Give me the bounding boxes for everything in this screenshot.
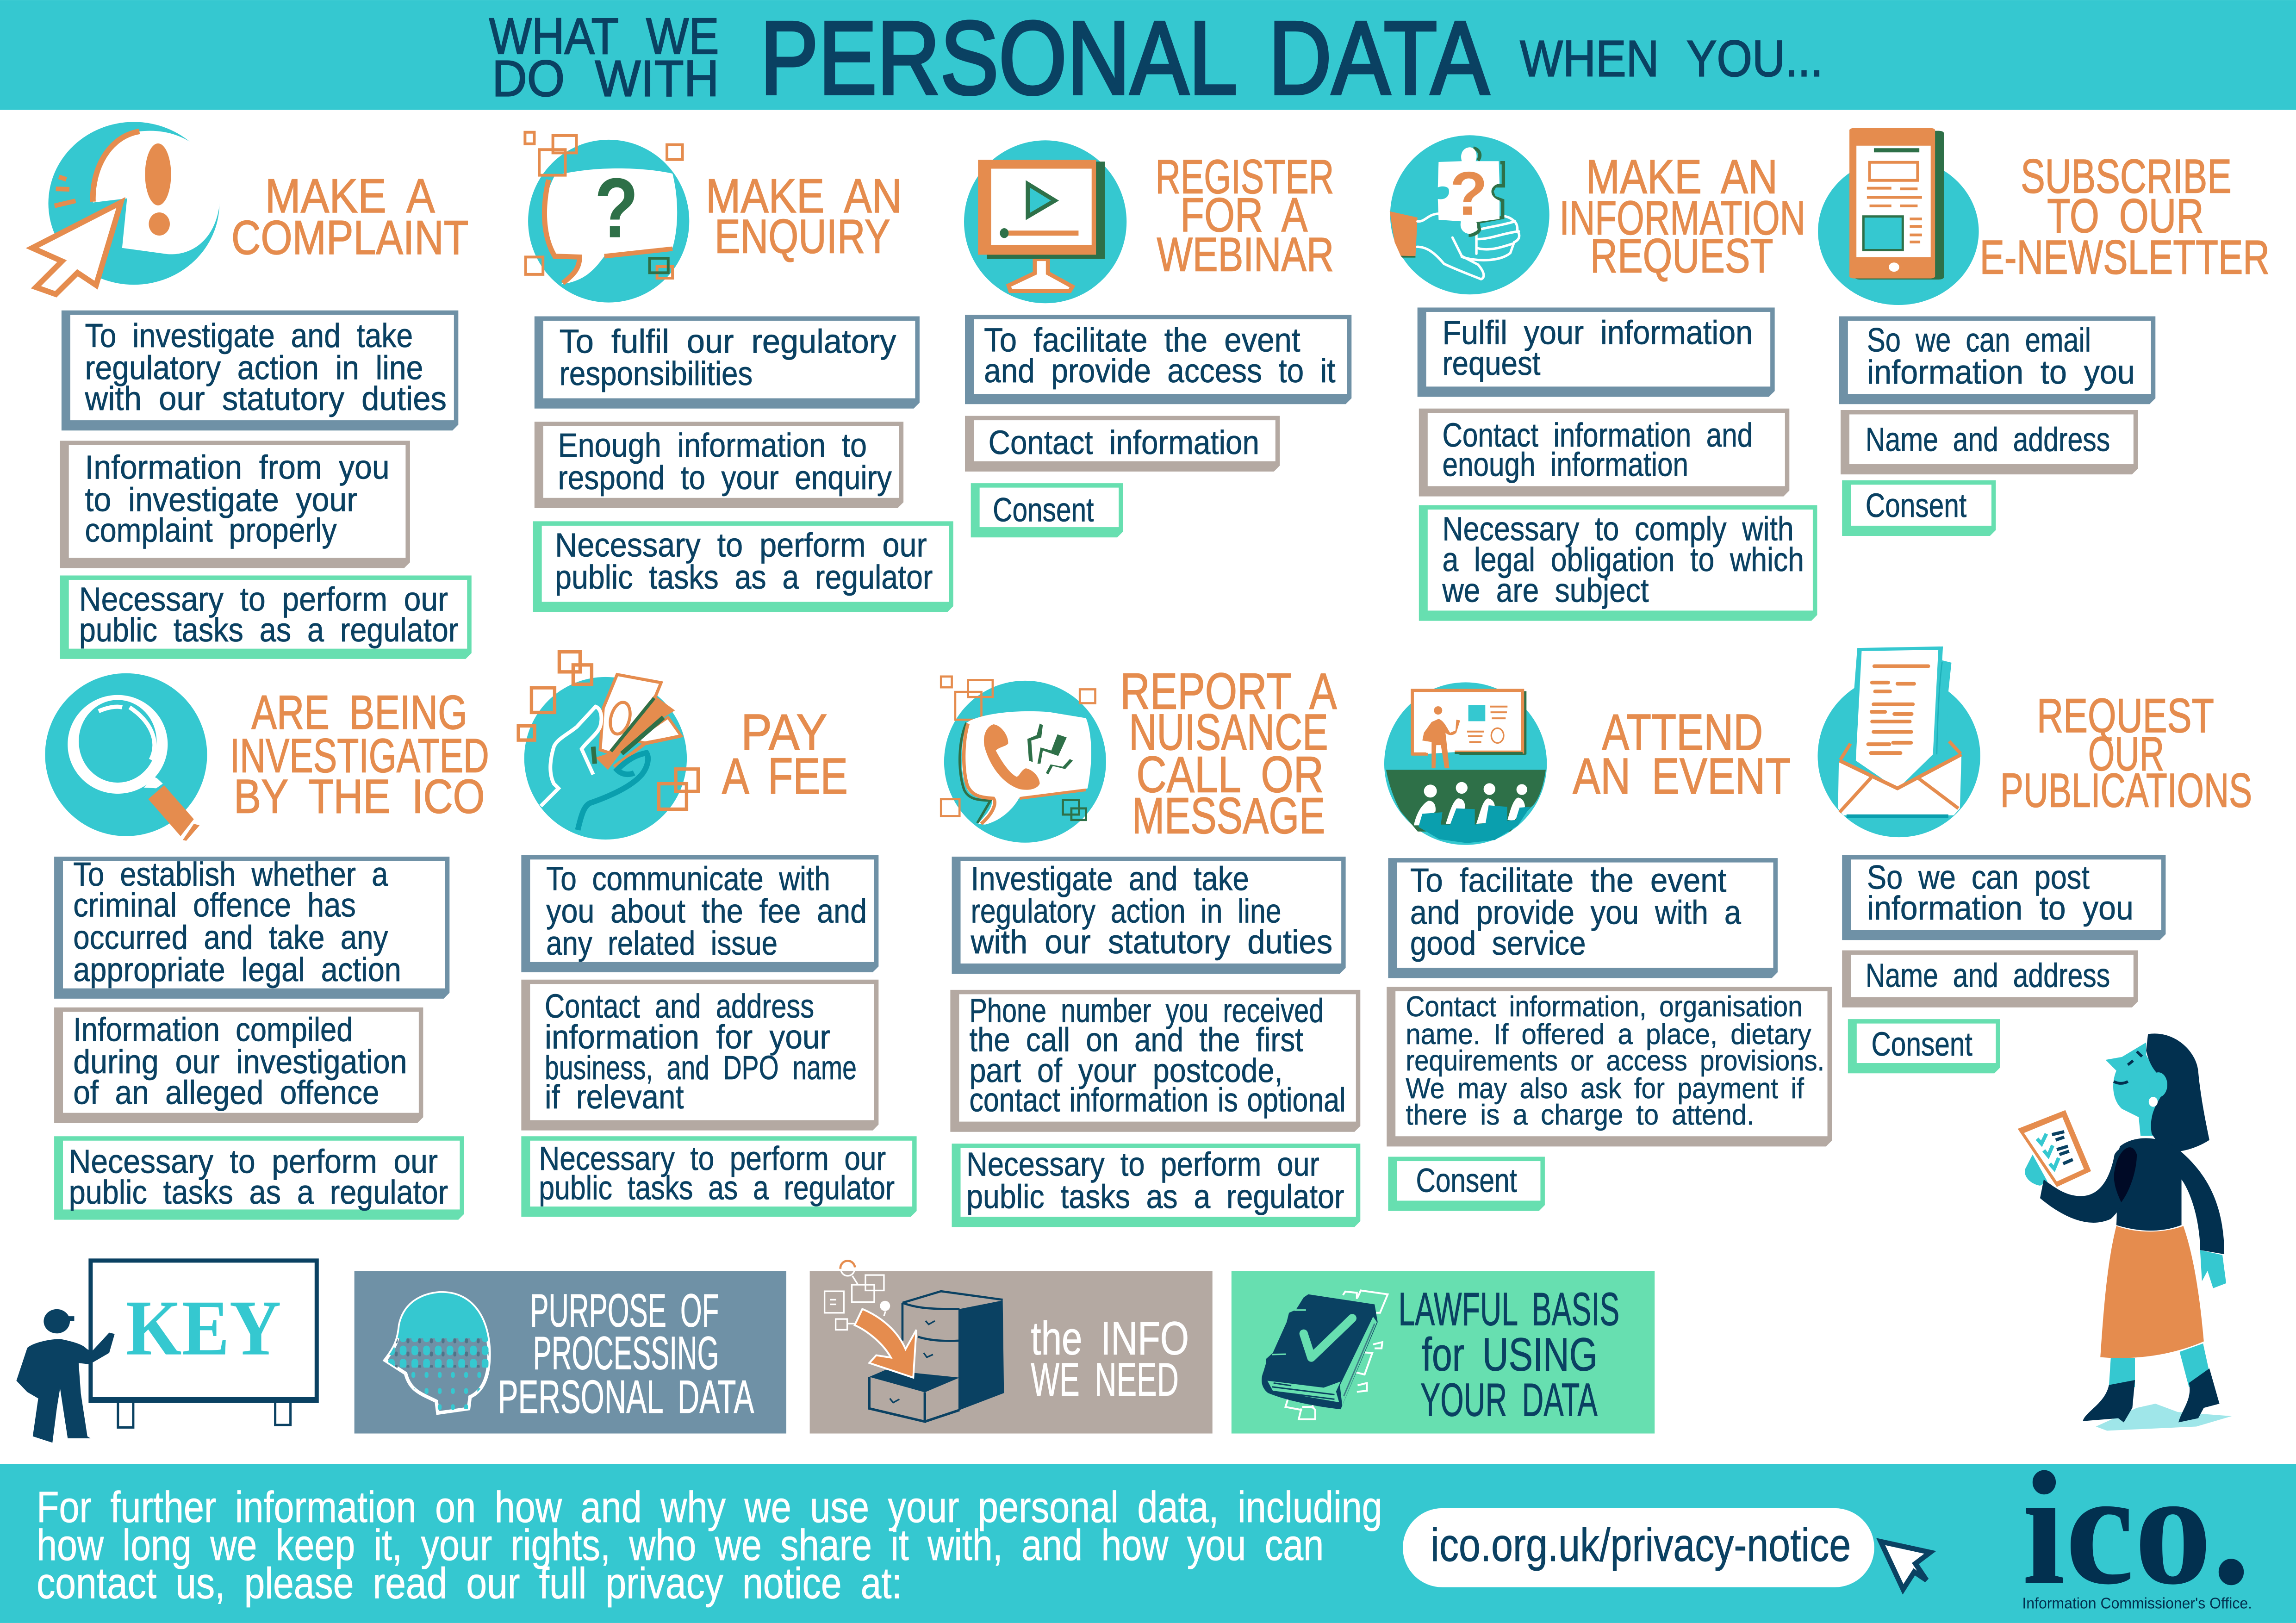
box: lawful basis: Necessary to comply with	[1442, 510, 1794, 548]
heading: CALL OR	[1136, 746, 1324, 803]
box: lawful basis	[60, 575, 472, 659]
box: information needed: respond to your enquiry	[558, 459, 892, 497]
box: information needed: if relevant	[545, 1078, 684, 1116]
box: lawful basis: public tasks as a regulator	[966, 1178, 1344, 1215]
heading: REQUEST	[2037, 689, 2214, 743]
heading: REPORT A	[1120, 663, 1337, 720]
icon: presenter and audience	[1384, 682, 1547, 845]
icon: speech bubble with ringing phone	[941, 677, 1106, 843]
panel: register for a webinar	[964, 140, 1351, 537]
footer text: how long we keep it, your rights, who we share it with, and how you can	[37, 1521, 1324, 1570]
text: YOUR DATA	[1420, 1374, 1598, 1426]
box: information needed: Information compiled	[73, 1011, 353, 1049]
key	[16, 1261, 317, 1443]
panel: pay a fee	[518, 652, 917, 1217]
box: information needed: Name and address	[1866, 421, 2110, 459]
heading: AN EVENT	[1573, 748, 1791, 805]
box: purpose: Investigate and take	[971, 860, 1249, 898]
heading: WEBINAR	[1157, 227, 1334, 281]
box: lawful basis: Consent	[1871, 1026, 1972, 1063]
title	[489, 0, 1823, 116]
box: lawful basis: we are subject	[1442, 572, 1649, 609]
icon: letter in open envelope	[1817, 647, 1980, 837]
heading: INFORMATION	[1560, 191, 1805, 245]
box: purpose: To investigate and take	[85, 317, 413, 354]
heading: INVESTIGATED	[230, 728, 489, 783]
privacy notice link pill: ico.org.uk/privacy-notice	[1431, 1519, 1851, 1571]
box: information needed: the call on and the first	[970, 1021, 1303, 1059]
box: purpose: regulatory action in line	[85, 349, 423, 387]
heading: TO OUR	[2047, 189, 2204, 243]
heading: MAKE AN	[1586, 150, 1778, 204]
box: lawful basis: Consent	[1416, 1162, 1517, 1199]
box: lawful basis: Consent	[993, 491, 1094, 529]
title: WHAT WE	[489, 8, 719, 65]
box: information needed	[1387, 987, 1832, 1146]
box: information needed	[950, 990, 1360, 1132]
box: information needed	[1419, 409, 1789, 497]
box: purpose: regulatory action in line	[971, 892, 1281, 930]
text: PROCESSING	[533, 1327, 719, 1379]
heading	[1573, 704, 1791, 805]
icon: book with tick	[1262, 1290, 1388, 1419]
heading: BY THE ICO	[234, 770, 485, 824]
box: information needed: Enough information to	[558, 427, 867, 464]
box: information needed: requirements or access provisions.	[1406, 1045, 1824, 1077]
heading	[1120, 663, 1337, 844]
heading: NUISANCE	[1129, 704, 1328, 761]
panel: make an enquiry	[525, 132, 953, 612]
presenter pointing at key board	[16, 1261, 317, 1443]
box: purpose	[1418, 307, 1775, 397]
box: purpose: appropriate legal action	[73, 951, 401, 989]
icon: magnifying glass	[45, 673, 207, 841]
text: WE NEED	[1031, 1353, 1179, 1405]
box: lawful basis	[971, 483, 1123, 537]
footer text	[37, 1483, 1382, 1608]
panel: make an information request	[1390, 135, 1817, 621]
key: the info we need	[810, 1261, 1213, 1434]
key: lawful basis for using your data	[1232, 1271, 1655, 1434]
box: information needed: Contact information and	[1442, 417, 1753, 454]
box: information needed: part of your postcode,	[970, 1052, 1283, 1089]
box: information needed	[1841, 410, 2138, 474]
panel: attend an event	[1384, 682, 1832, 1211]
key: purpose of processing personal data	[355, 1271, 786, 1434]
box: lawful basis	[54, 1136, 464, 1220]
heading: REQUEST	[1590, 229, 1773, 283]
box: lawful basis	[1419, 505, 1817, 621]
title: WHEN YOU...	[1520, 31, 1823, 87]
box: purpose	[952, 857, 1346, 974]
icon: cursor	[1881, 1542, 1930, 1589]
box: purpose: request	[1442, 345, 1540, 382]
box: purpose	[1842, 855, 2165, 940]
box: information needed	[1842, 950, 2138, 1007]
box: information needed: Phone number you received	[970, 992, 1324, 1029]
panel: request our publications	[1817, 647, 2252, 1073]
heading: ARE BEING	[251, 685, 467, 740]
heading: ATTEND	[1602, 704, 1763, 761]
box: purpose: To facilitate the event	[1410, 862, 1726, 899]
box: purpose	[1388, 858, 1778, 978]
privacy notice link pill	[1403, 1508, 1874, 1587]
box: purpose: with our statutory duties	[85, 380, 447, 417]
box: information needed: to investigate your	[85, 481, 357, 518]
header banner	[0, 0, 2296, 116]
box: information needed: of an alleged offence	[73, 1074, 379, 1112]
box: purpose: So we can email	[1867, 321, 2091, 359]
box: information needed	[965, 416, 1280, 472]
icon: speech bubble with question mark	[525, 132, 689, 303]
box: lawful basis: Necessary to perform our	[79, 580, 448, 618]
box: information needed: Name and address	[1866, 957, 2110, 995]
heading	[2000, 689, 2252, 817]
key word: KEY	[126, 1284, 281, 1372]
box: purpose: any related issue	[546, 925, 778, 962]
box: purpose: and provide you with a	[1410, 894, 1741, 931]
box: information needed	[54, 1007, 423, 1123]
heading: PAY	[741, 704, 828, 761]
heading: MESSAGE	[1132, 787, 1325, 844]
box: information needed: there is a charge to attend.	[1406, 1099, 1754, 1131]
box: lawful basis	[952, 1144, 1360, 1227]
heading	[231, 169, 468, 265]
heading	[1980, 149, 2270, 285]
heading: MAKE A	[265, 169, 435, 223]
text: PERSONAL DATA	[498, 1371, 754, 1423]
box: information needed: business, and DPO name	[545, 1049, 857, 1087]
footer text: For further information on how and why we use your personal data, including	[37, 1483, 1382, 1532]
box: lawful basis: a legal obligation to which	[1442, 541, 1804, 578]
box: purpose: you about the fee and	[546, 892, 867, 930]
box: lawful basis: public tasks as a regulator	[539, 1169, 895, 1206]
box: purpose: To establish whether a	[73, 856, 388, 893]
box: purpose	[535, 316, 920, 409]
panel: report a nuisance call or message	[941, 663, 1360, 1227]
box: information needed: Contact and address	[545, 988, 814, 1025]
box: lawful basis	[533, 521, 953, 612]
box: information needed: information for your	[545, 1018, 830, 1056]
box: information needed	[60, 441, 410, 568]
text: for USING	[1422, 1328, 1598, 1380]
heading: COMPLAINT	[231, 211, 468, 265]
box: purpose: So we can post	[1867, 859, 2090, 896]
heading	[1155, 150, 1334, 281]
box: lawful basis: public tasks as a regulator	[69, 1174, 448, 1211]
box: lawful basis	[1842, 480, 1996, 536]
heading	[1560, 150, 1805, 283]
box: purpose: occurred and take any	[73, 919, 388, 956]
box: purpose: and provide access to it	[984, 352, 1335, 390]
title: DO WITH	[492, 50, 719, 107]
icon: head with halftone dots	[384, 1292, 491, 1414]
text	[1031, 1312, 1189, 1405]
box: purpose: Fulfil your information	[1442, 314, 1753, 352]
footer text: contact us, please read our full privacy notice at:	[37, 1559, 902, 1608]
box: information needed: We may also ask for payment if	[1406, 1073, 1804, 1105]
box: lawful basis: public tasks as a regulator	[555, 559, 933, 596]
box: information needed: contact information is optional	[970, 1081, 1346, 1119]
box: lawful basis: Necessary to perform our	[69, 1143, 438, 1180]
text: LAWFUL BASIS	[1399, 1283, 1619, 1335]
heading	[706, 169, 902, 263]
box: purpose	[54, 856, 449, 999]
heading: MAKE AN	[706, 169, 902, 223]
box: purpose: responsibilities	[560, 355, 753, 392]
box: purpose: good service	[1410, 925, 1586, 962]
box: information needed	[521, 980, 878, 1131]
panel: make a complaint	[32, 122, 472, 659]
box: purpose: To communicate with	[546, 860, 830, 898]
box: purpose: To fulfil our regulatory	[560, 323, 896, 361]
box: information needed: Information from you	[85, 449, 390, 486]
box: information needed: during our investigation	[73, 1043, 407, 1081]
box: purpose	[1839, 316, 2155, 404]
box: lawful basis: Consent	[1866, 487, 1966, 524]
heading: SUBSCRIBE	[2021, 149, 2232, 203]
box: purpose: To facilitate the event	[984, 321, 1300, 359]
box: purpose: criminal offence has	[73, 887, 356, 924]
heading: A FEE	[722, 748, 848, 805]
box: purpose	[521, 855, 878, 972]
heading: FOR A	[1180, 188, 1308, 242]
text: PURPOSE OF	[530, 1285, 719, 1337]
box: purpose: information to you	[1867, 889, 2134, 927]
icon: speech bubble with question mark: ?	[595, 161, 638, 255]
box: lawful basis: Necessary to perform our	[539, 1140, 886, 1177]
box: lawful basis	[1848, 1019, 2000, 1073]
box: information needed: name. If offered a place, dietary	[1406, 1019, 1811, 1051]
illustration: woman reading a tablet	[2018, 1033, 2232, 1430]
panel: subscribe to our e-newsletter	[1818, 128, 2270, 536]
box: purpose	[965, 315, 1351, 404]
box: lawful basis	[1388, 1157, 1545, 1211]
box: information needed: Contact information, organisation	[1406, 991, 1803, 1023]
box: lawful basis	[521, 1136, 917, 1217]
icon: hand holding puzzle piece	[1390, 135, 1549, 294]
icon: filing cabinet with arrow	[825, 1261, 1004, 1422]
ICO logo: ico.	[2022, 1438, 2251, 1618]
text: the INFO	[1031, 1312, 1189, 1365]
heading: REGISTER	[1155, 150, 1334, 204]
text	[1399, 1283, 1619, 1426]
box: lawful basis: Necessary to perform our	[966, 1146, 1319, 1183]
heading: ENQUIRY	[715, 209, 890, 263]
heading	[722, 704, 848, 805]
box: purpose: with our statutory duties	[971, 923, 1332, 961]
ICO logo: Information Commissioner's Office.	[2022, 1595, 2252, 1612]
box: lawful basis: Necessary to perform our	[555, 526, 927, 564]
box: information needed: complaint properly	[85, 512, 337, 549]
icon: presentation screen with play button	[964, 140, 1126, 303]
icon: hand holding puzzle piece: ?	[1450, 159, 1487, 228]
icon: cursor and exclamation mark	[32, 122, 220, 294]
heading: OUR	[2088, 727, 2164, 781]
heading	[230, 685, 489, 824]
title: PERSONAL DATA	[760, 0, 1489, 116]
icon: smartphone showing newsletter	[1818, 128, 1979, 305]
box: purpose	[62, 311, 458, 430]
panel: are being investigated by the ICO	[45, 673, 489, 1220]
box: information needed: enough information	[1442, 446, 1688, 483]
footer band	[0, 1438, 2296, 1623]
box: purpose: information to you	[1867, 354, 2135, 391]
box: information needed	[535, 422, 903, 508]
icon: hand holding banknotes	[518, 652, 698, 839]
box: information needed: Contact information	[989, 424, 1259, 461]
box: lawful basis: public tasks as a regulator	[79, 611, 458, 649]
text	[498, 1285, 754, 1423]
